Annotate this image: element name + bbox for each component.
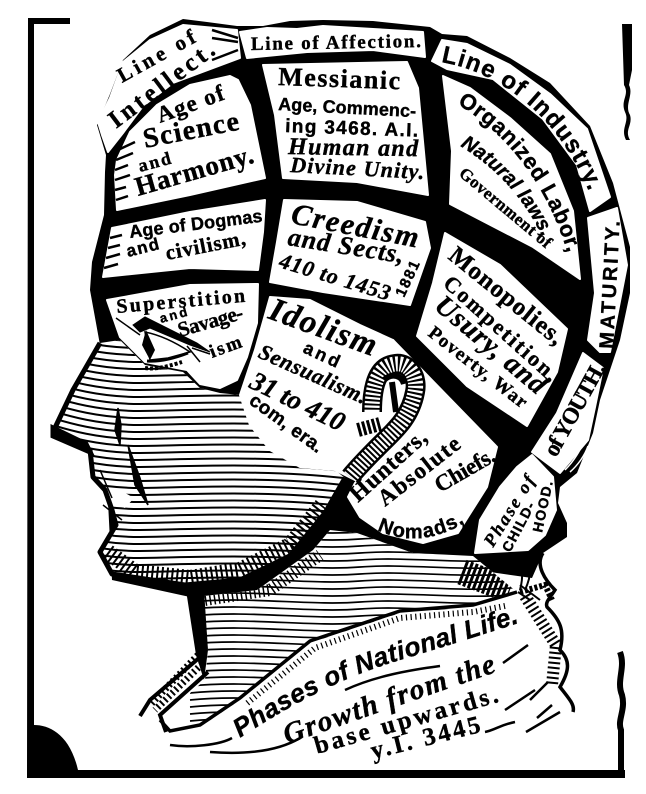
banner: Line of Intellect: Intellect. bbox=[103, 36, 220, 134]
banner: Maturity bbox=[588, 208, 627, 352]
panel: Superstition and savagism: Savage- bbox=[175, 300, 246, 342]
panel: Hunters, Absolute Chiefs, Nomads: Hunters, bbox=[345, 425, 433, 507]
scarf knot bbox=[170, 553, 573, 753]
panel: Age of Dogmas and civilism: and bbox=[124, 234, 161, 261]
banner: Line of Intellect: Line of bbox=[113, 24, 201, 87]
neck knot shading bbox=[462, 572, 510, 590]
panel: Superstition and savagism: Superstition bbox=[116, 285, 246, 318]
panel: Organized Labor: Government of bbox=[455, 164, 556, 252]
panel: Superstition and savagism bbox=[107, 284, 258, 388]
banner: Line of Industry: Line of Industry. bbox=[442, 46, 598, 190]
panel: Superstition and savagism: and bbox=[158, 304, 189, 326]
panel: Age of Dogmas and civilism: civilism, bbox=[163, 226, 247, 265]
panel: Messianic Age bbox=[263, 62, 428, 195]
panel: Hunters, Absolute Chiefs, Nomads: Nomads, bbox=[378, 518, 464, 539]
face hatching bbox=[58, 340, 345, 580]
banner: of Youth: of YOUTH. bbox=[539, 358, 610, 460]
panel: Idolism and Sensualism: Idolism bbox=[263, 291, 382, 364]
icon: eye bbox=[116, 317, 210, 368]
panel: Hunters, Absolute Chiefs, Nomads: Chiefs. bbox=[430, 443, 500, 497]
banner: Phase of Childhood: Phase of bbox=[479, 470, 540, 551]
caption: Phases of National Life: Phases of National Life. bbox=[233, 610, 517, 738]
panel: Age of Science and Harmony: Age of bbox=[153, 80, 228, 128]
banner: Line of Affection: Line of Affection. bbox=[251, 31, 421, 55]
banner: Phase of Childhood: HOOD. bbox=[529, 479, 556, 534]
panel: Creedism and Sects: 1881 bbox=[392, 258, 424, 300]
panel: Monopolies: Usury, and bbox=[429, 290, 553, 401]
panel: Idolism and Sensualism: and bbox=[300, 337, 343, 372]
panel: Messianic Age: Human and bbox=[287, 134, 419, 162]
panel: Creedism and Sects: 410 to 1453 bbox=[276, 248, 394, 305]
panel: Age of Dogmas and civilism bbox=[103, 200, 265, 277]
panel: Monopolies: Poverty, War bbox=[424, 322, 532, 413]
banner: Maturity: MATURITY. bbox=[596, 220, 625, 349]
panel: Age of Science and Harmony bbox=[115, 76, 265, 210]
panel: Messianic Age: Age, Commenc- bbox=[278, 94, 417, 121]
panel: Monopolies: Monopolies, bbox=[443, 242, 569, 351]
panel: Creedism and Sects: Creedism bbox=[289, 197, 422, 254]
banner: Line of Intellect bbox=[98, 24, 240, 152]
panel: Monopolies bbox=[417, 233, 569, 426]
panel: Creedism and Sects bbox=[270, 197, 430, 305]
panel: Age of Dogmas and civilism: Age of Dogmas bbox=[128, 206, 263, 242]
panel: Messianic Age: Divine Unity. bbox=[289, 152, 425, 184]
panel: Messianic Age: Messianic bbox=[278, 62, 401, 95]
panel: Superstition and savagism: ism bbox=[207, 332, 245, 363]
panel: Hunters, Absolute Chiefs, Nomads: Absolute bbox=[373, 431, 465, 511]
panel: Idolism and Sensualism bbox=[240, 291, 425, 480]
panel: Idolism and Sensualism: 31 to 410 bbox=[244, 365, 351, 437]
panel: Age of Science and Harmony: and bbox=[136, 148, 173, 176]
caption: Phases of National Life: Growth from the bbox=[279, 648, 499, 751]
head silhouette bbox=[90, 19, 630, 597]
jaw cross-hatching bbox=[108, 505, 322, 578]
panel: Idolism and Sensualism: Sensualism. bbox=[255, 339, 371, 409]
collar fold bbox=[140, 652, 208, 732]
banner: Phase of Childhood: CHILD- bbox=[499, 499, 538, 554]
face outline bbox=[53, 343, 345, 585]
icon: ear bbox=[350, 364, 416, 477]
mouth and nose shadows bbox=[100, 408, 148, 520]
banner: Phase of Childhood bbox=[475, 455, 556, 590]
neck bbox=[160, 530, 530, 731]
panel: Organized Labor: Natural laws, bbox=[460, 136, 548, 236]
caption: Phases of National Life: y.I. 3445 bbox=[368, 712, 483, 765]
caption: Phases of National Life: base upwards. bbox=[311, 681, 501, 760]
panel: Idolism and Sensualism: com, era. bbox=[245, 390, 327, 458]
panel: Messianic Age: ing 3468. A.I. bbox=[285, 116, 418, 142]
panel: Creedism and Sects: and Sects, bbox=[286, 222, 406, 269]
face bbox=[50, 340, 345, 582]
panel: Hunters, Absolute Chiefs, Nomads bbox=[345, 339, 500, 544]
panel: Organized Labor: Organized Labor, bbox=[460, 94, 578, 252]
panel: Age of Science and Harmony: Harmony. bbox=[131, 139, 257, 202]
panel: Age of Science and Harmony: Science bbox=[140, 106, 242, 155]
panel: Monopolies: Competition, bbox=[439, 270, 564, 386]
banner: Line of Affection bbox=[240, 26, 425, 58]
